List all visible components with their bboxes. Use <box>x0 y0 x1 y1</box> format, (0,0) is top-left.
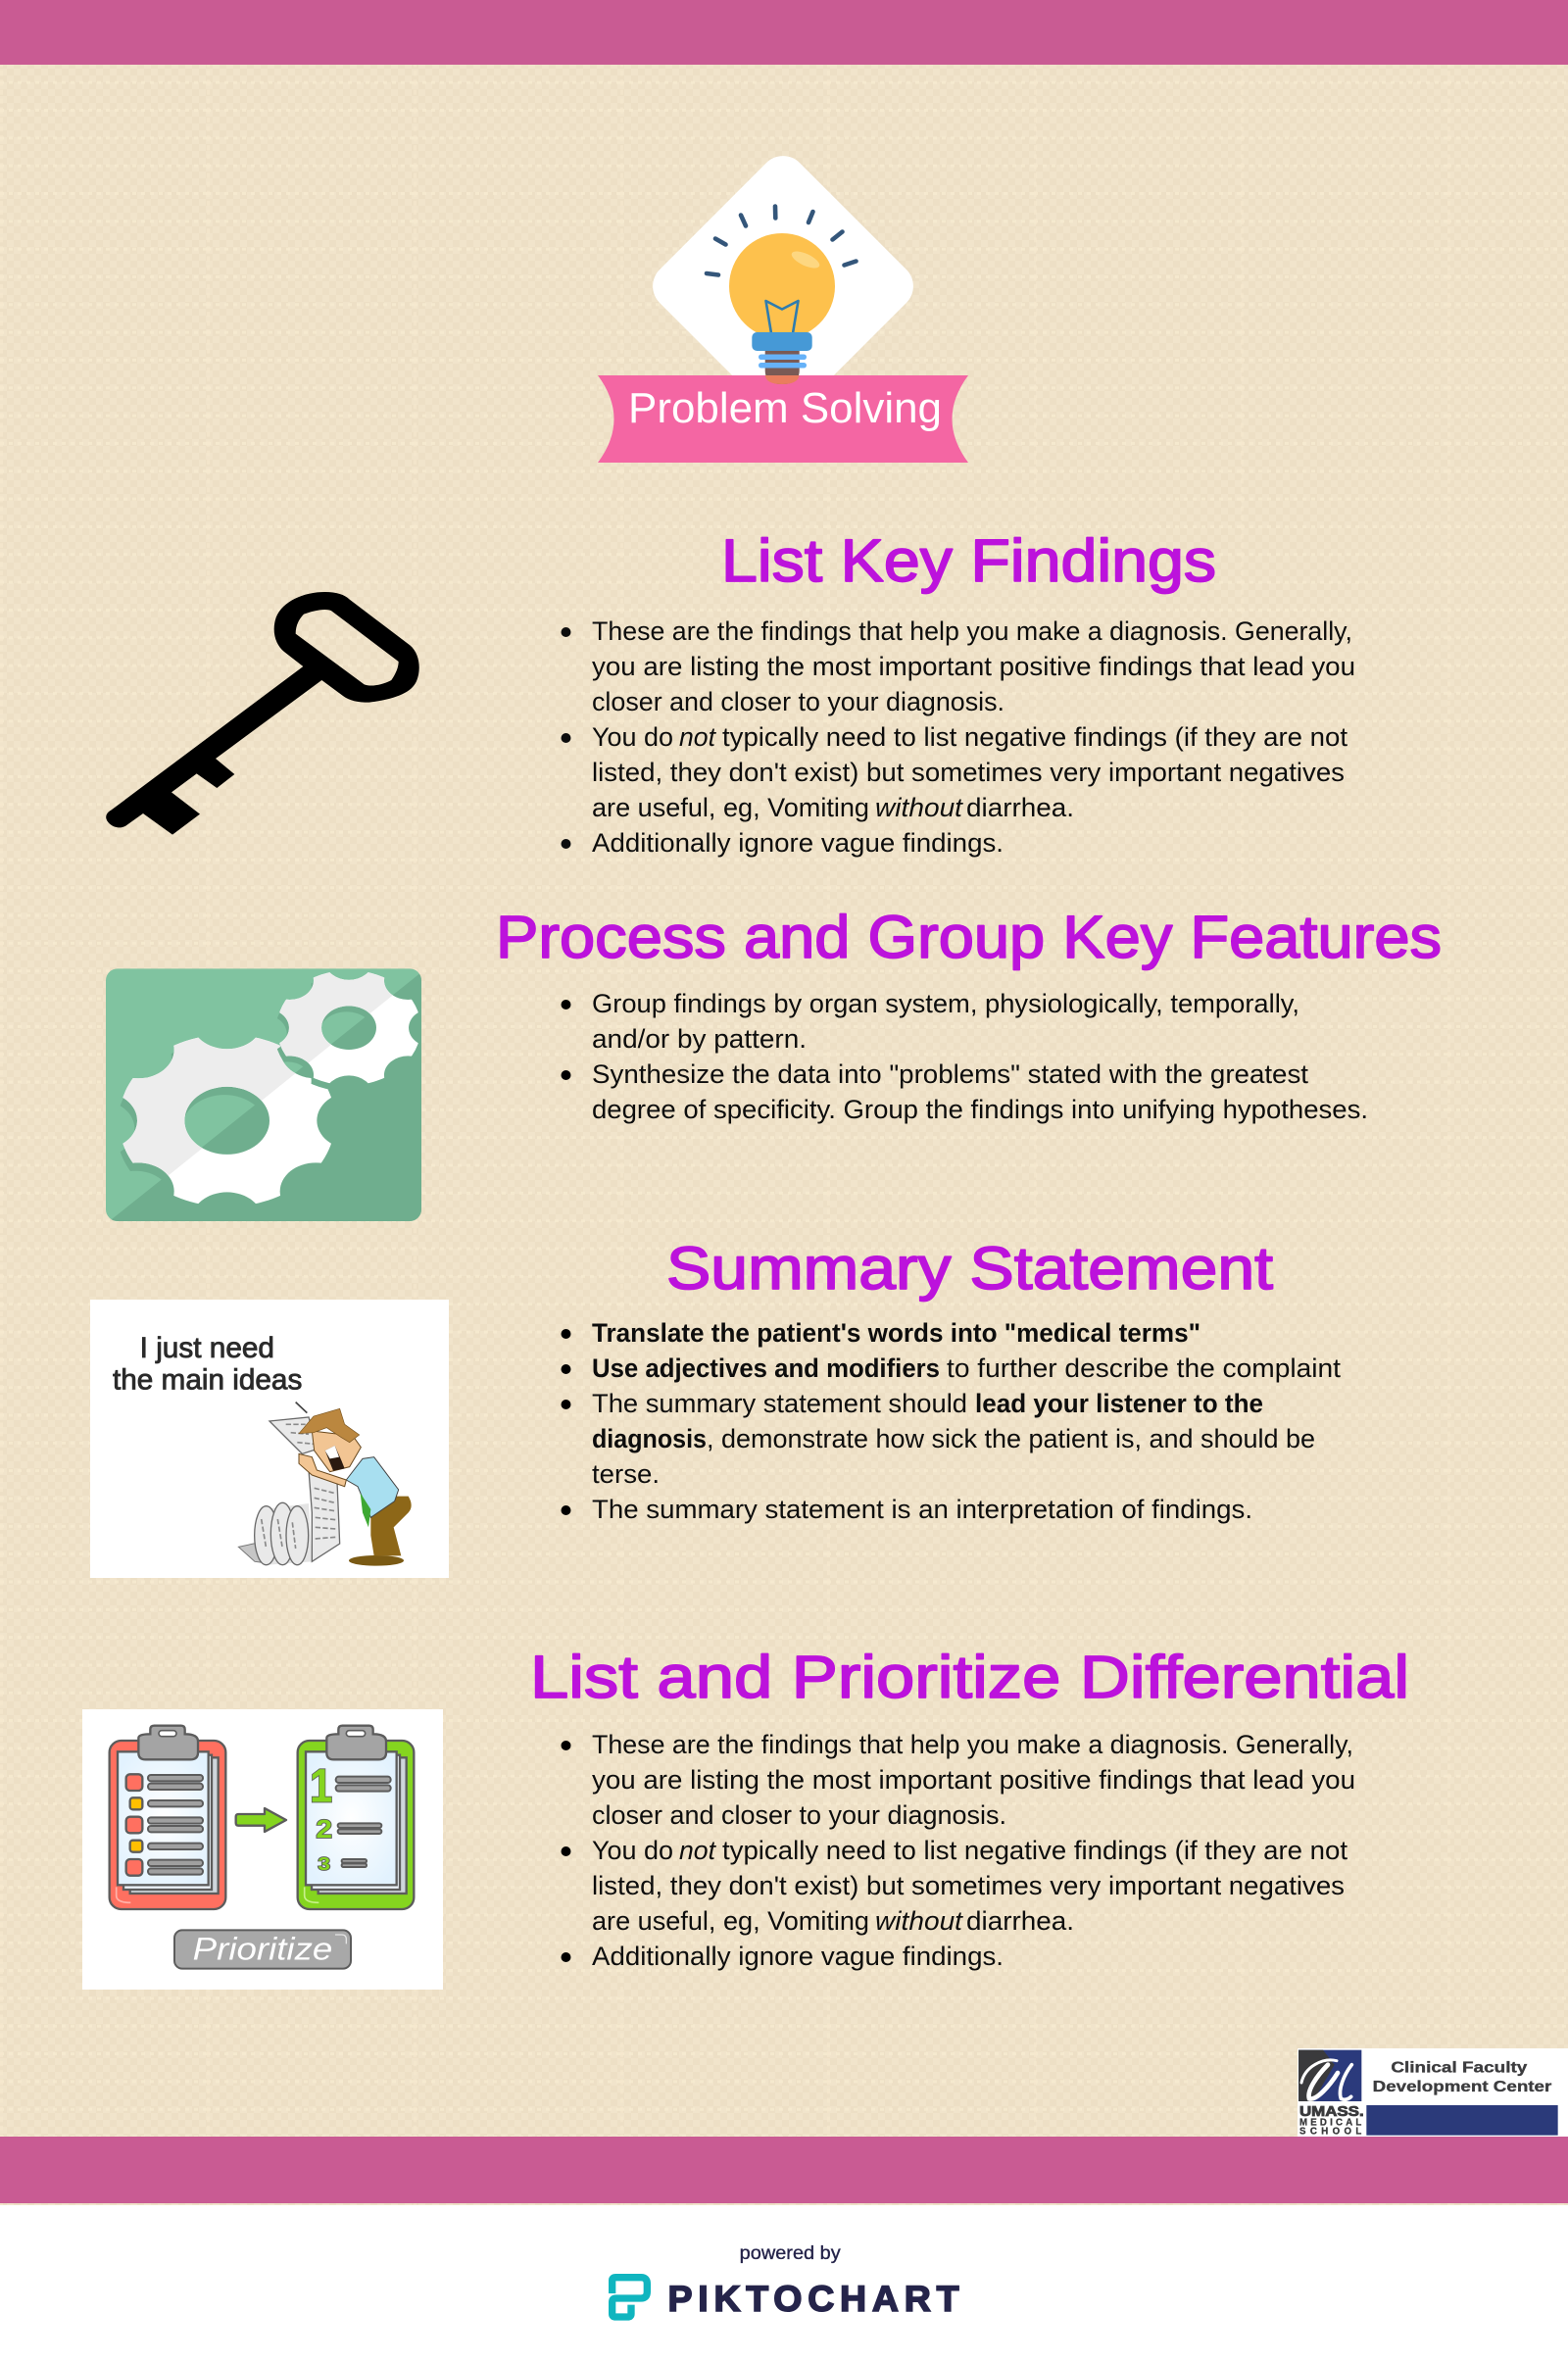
heading: list and prioritize differential: List and Prioritize Differential <box>530 1644 1409 1710</box>
icon: gears <box>106 968 421 1221</box>
numbers 1 2 3: 2 <box>316 1814 332 1844</box>
clipboard: prioritized list <box>298 1726 414 1909</box>
clipboard: unordered list <box>110 1726 225 1909</box>
bullet list: differential: Additionally ignore vague findings. <box>592 1942 1004 1971</box>
panel: list key findings <box>561 527 1355 858</box>
bullet list: key findings: typically need to list negative findings (if they are not <box>722 722 1348 752</box>
bullet list: key features: Group findings by organ system, physiologically, temporally, <box>592 989 1299 1018</box>
numbers 1 2 3: 3 <box>318 1853 330 1874</box>
button: prioritize: Prioritize <box>193 1930 332 1966</box>
footer: powered by piktochart: powered by <box>740 2242 841 2264</box>
bullet list: key findings: without <box>875 793 964 822</box>
logo: UMass Clinical Faculty Development Center: MEDICAL <box>1299 2117 1361 2128</box>
bullet list: summary statement: , demonstrate how sick the patient is, and should be <box>707 1424 1315 1453</box>
bullet list: summary statement <box>561 1318 1342 1524</box>
icon: key <box>106 592 419 835</box>
heading: list key findings: List Key Findings <box>721 527 1216 594</box>
bullet list: key findings <box>561 616 1355 858</box>
speech caption: I just need <box>140 1332 274 1364</box>
bullet list: differential: diarrhea. <box>966 1906 1074 1936</box>
bullet list: summary statement: The summary statement is an interpretation of findings. <box>592 1495 1252 1524</box>
banner: Problem Solving: Problem Solving <box>628 384 942 432</box>
bullet list: differential <box>561 1730 1355 1971</box>
image: cartoon man reading scroll <box>90 1300 449 1578</box>
bullet list: summary statement: Use adjectives and modifiers <box>592 1353 940 1383</box>
logo: UMass Clinical Faculty Development Center: SCHOOL <box>1299 2127 1361 2138</box>
bullet list: key findings: diarrhea. <box>966 793 1074 822</box>
icon: piktochart logo <box>612 2278 647 2317</box>
numbers 1 2 3 <box>310 1759 332 1874</box>
top bar <box>0 0 1568 65</box>
bullet list: summary statement: lead your listener to the <box>975 1389 1263 1418</box>
bullet list: summary statement: The summary statement should <box>592 1389 967 1418</box>
bullet list: differential: closer and closer to your diagnosis. <box>592 1800 1006 1830</box>
bullet list: key findings: You do <box>592 722 673 752</box>
bullet list: key features: degree of specificity. Group the findings into unifying hypotheses. <box>592 1095 1368 1124</box>
logo: UMass Clinical Faculty Development Center: Development Center <box>1373 2079 1551 2095</box>
bullet list: differential: These are the findings that help you make a diagnosis. Generally, <box>592 1730 1353 1759</box>
bullet list: key findings: are useful, eg, Vomiting <box>592 793 869 822</box>
bullet list: differential: without <box>875 1906 964 1936</box>
logo: UMass Clinical Faculty Development Center: Clinical Faculty <box>1391 2059 1528 2076</box>
heading: summary statement: Summary Statement <box>666 1235 1273 1302</box>
bullet list: differential: not <box>679 1836 716 1865</box>
speech caption: the main ideas <box>113 1363 302 1396</box>
bullet list: differential: You do <box>592 1836 673 1865</box>
panel: list and prioritize differential <box>530 1644 1409 1971</box>
footer: powered by piktochart: PIKTOCHART <box>668 2278 959 2319</box>
bullet list: summary statement: diagnosis <box>592 1424 707 1453</box>
bullet list: key findings: not <box>679 722 716 752</box>
arrow <box>236 1808 286 1832</box>
bullet list: summary statement: terse. <box>592 1459 660 1489</box>
bullet list: key findings: These are the findings that help you make a diagnosis. Generally, <box>592 616 1352 646</box>
bullet list: key findings: listed, they don't exist) but sometimes very important negatives <box>592 758 1345 787</box>
bullet list: key features: Synthesize the data into "problems" stated with the greatest <box>592 1059 1309 1089</box>
bullet list: differential: are useful, eg, Vomiting <box>592 1906 869 1936</box>
heading: process and group key features: Process and Group Key Features <box>496 904 1442 970</box>
button: prioritize <box>174 1930 351 1969</box>
bullet list: key findings: you are listing the most important positive findings that lead you <box>592 652 1355 681</box>
bullet list: differential: you are listing the most important positive findings that lead you <box>592 1765 1355 1795</box>
panel: summary statement <box>561 1235 1342 1524</box>
numbers 1 2 3: 1 <box>310 1759 332 1812</box>
bullet list: key findings: closer and closer to your diagnosis. <box>592 687 1004 716</box>
icon: light bulb badge <box>643 146 923 426</box>
bullet list: summary statement: Translate the patient's words into "medical terms" <box>592 1318 1200 1348</box>
bullet list: key findings: Additionally ignore vague findings. <box>592 828 1004 858</box>
bullet list: differential: listed, they don't exist) but sometimes very important negatives <box>592 1871 1345 1900</box>
bottom bar <box>0 2137 1568 2203</box>
logo: UMass Clinical Faculty Development Center: UMASS. <box>1299 2104 1364 2120</box>
image: prioritize clipboards <box>82 1709 443 1990</box>
logo: UMass Clinical Faculty Development Center <box>1298 2048 1568 2138</box>
footer: powered by piktochart <box>612 2242 959 2319</box>
bullet list: key features <box>561 989 1368 1124</box>
speech caption <box>113 1332 302 1396</box>
banner: Problem Solving <box>598 332 968 463</box>
bullet list: key features: and/or by pattern. <box>592 1024 807 1054</box>
panel: process and group key features <box>496 904 1442 1124</box>
bullet list: summary statement: to further describe the complaint <box>947 1353 1342 1383</box>
bullet list: differential: typically need to list negative findings (if they are not <box>722 1836 1348 1865</box>
